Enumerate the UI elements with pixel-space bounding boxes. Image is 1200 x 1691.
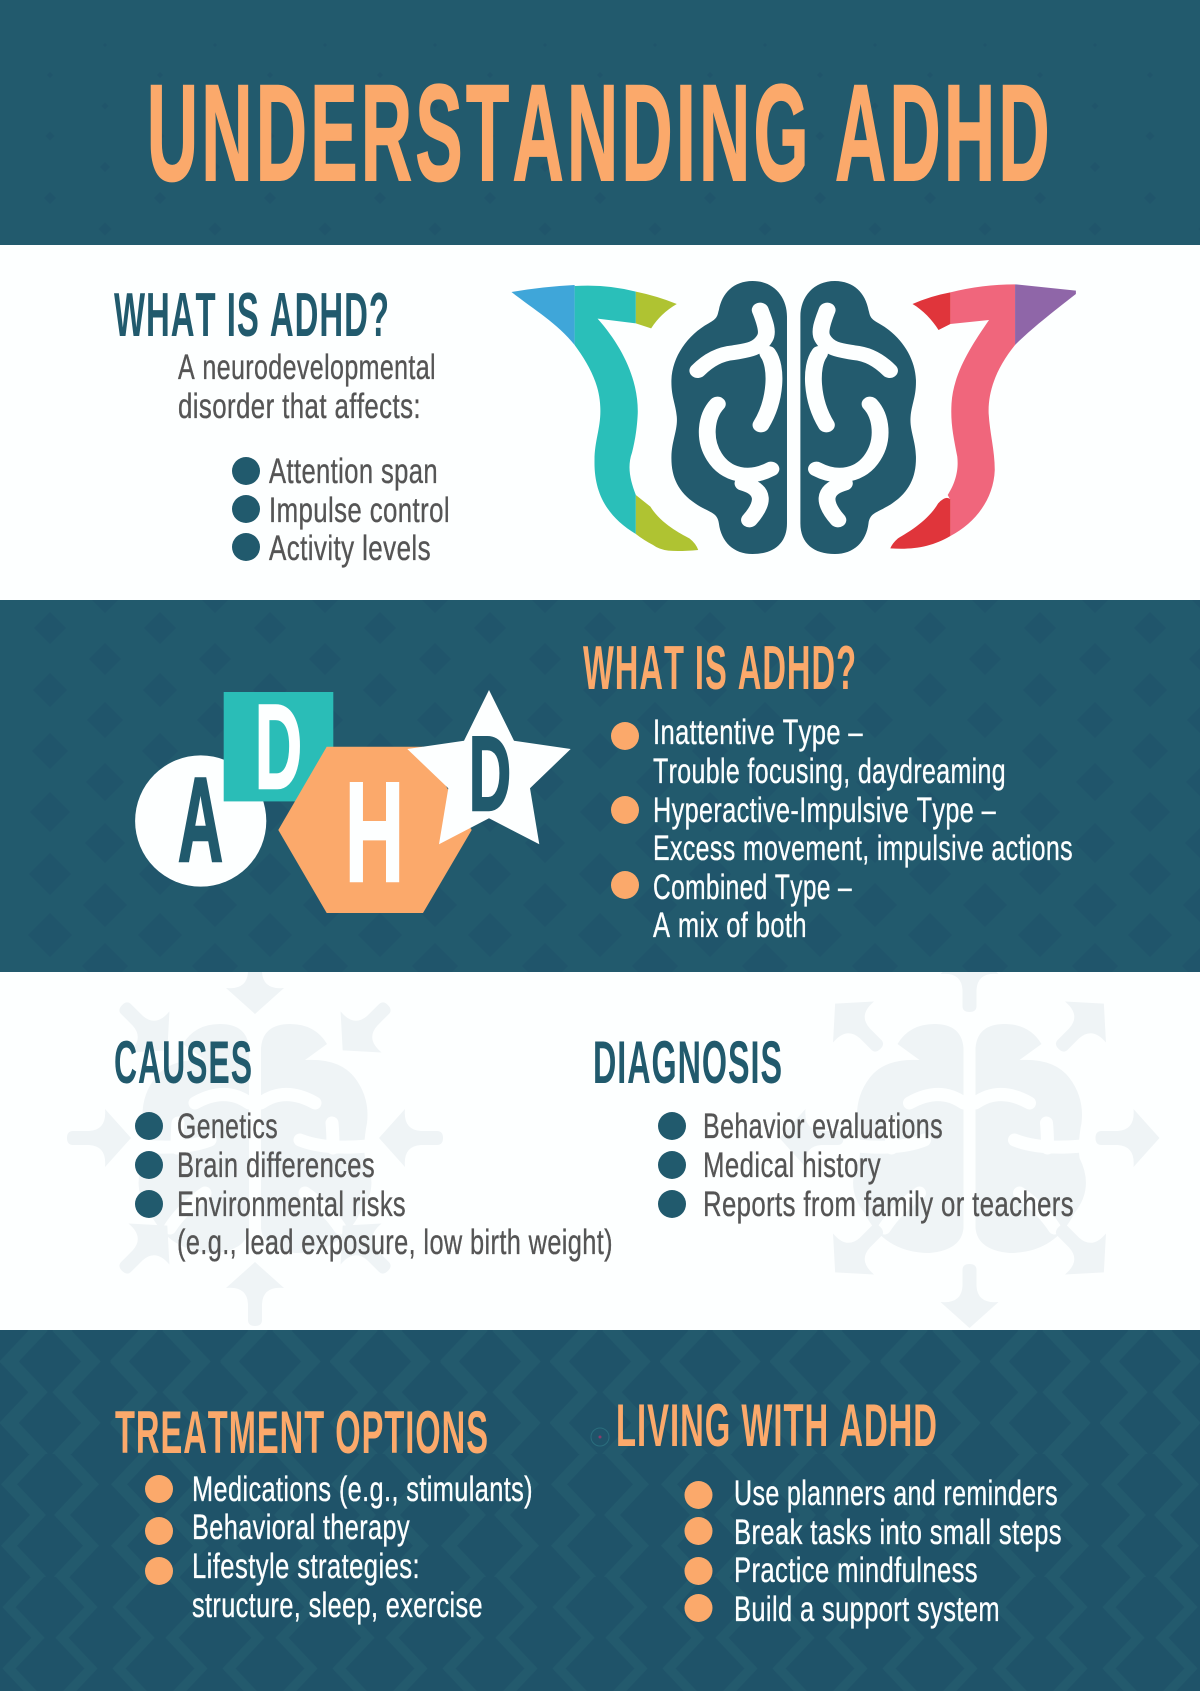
tips list: Use planners and reminders [734, 1474, 1058, 1513]
heading: TREATMENT OPTIONS [115, 1399, 489, 1466]
definition text: A neurodevelopmental [178, 348, 436, 387]
heading: WHAT IS ADHD? [583, 634, 857, 703]
star with D [407, 690, 571, 844]
types list: Combined Type – [653, 868, 852, 907]
square with D: D [255, 680, 302, 814]
definition text [178, 348, 436, 426]
small ring marker [591, 1428, 609, 1446]
circle with A: A [178, 753, 223, 887]
heading: WHAT IS ADHD? [114, 281, 390, 350]
panel: ADHD types [583, 634, 1073, 945]
heading: CAUSES [114, 1029, 253, 1096]
diagnosis list [658, 1107, 1074, 1224]
hexagon with H: H [345, 753, 404, 912]
causes list: (e.g., lead exposure, low birth weight) [177, 1223, 613, 1262]
causes list: Genetics [177, 1107, 278, 1146]
tips list: Build a support system [734, 1590, 1000, 1629]
causes list: Brain differences [177, 1146, 375, 1185]
heading: DIAGNOSIS [593, 1029, 783, 1096]
definition text: disorder that affects: [178, 387, 421, 426]
treatment list: Behavioral therapy [192, 1508, 410, 1547]
treatment list: Medications (e.g., stimulants) [192, 1470, 533, 1509]
tips list [684, 1474, 1062, 1629]
hexagon with H [278, 747, 472, 913]
panel background: what is ADHD [0, 245, 1200, 600]
bullet list: Attention span [269, 452, 438, 491]
brain [671, 281, 916, 554]
panel: causes [114, 1029, 613, 1262]
types list: Inattentive Type – [653, 713, 863, 752]
types list: A mix of both [653, 906, 807, 945]
illustration: ADHD letter shapes [135, 680, 571, 913]
panel: what is ADHD [114, 281, 450, 568]
types list [611, 713, 1073, 945]
square with D [224, 680, 333, 814]
tips list: Practice mindfulness [734, 1551, 978, 1590]
header band [0, 0, 1200, 245]
types list: Trouble focusing, daydreaming [653, 752, 1006, 791]
bullet list: Impulse control [269, 491, 450, 530]
treatment list [145, 1470, 533, 1625]
causes list [135, 1107, 613, 1262]
treatment list: Lifestyle strategies: [192, 1547, 420, 1586]
panel: living with ADHD [591, 1392, 1062, 1629]
panel background: types [0, 598, 1200, 972]
heading: LIVING WITH ADHD [616, 1392, 938, 1459]
circle with A [135, 753, 266, 887]
panel: treatment options [115, 1399, 533, 1625]
bullet list: Activity levels [269, 529, 431, 568]
panel background: treatment and living [0, 1330, 1200, 1691]
panel: diagnosis [593, 1029, 1074, 1224]
types list: Hyperactive-Impulsive Type – [653, 791, 996, 830]
watermark: brain with inward arrows [67, 950, 443, 1326]
illustration: brain with coloured ribbons [511, 281, 1076, 554]
panel background: causes and diagnosis [0, 972, 1200, 1330]
diagnosis list: Reports from family or teachers [703, 1185, 1074, 1224]
right ribbon [890, 284, 1076, 549]
left ribbon [511, 285, 698, 551]
star with D: D [469, 715, 511, 833]
tips list: Break tasks into small steps [734, 1513, 1062, 1552]
bullet list [232, 452, 450, 568]
causes list: Environmental risks [177, 1185, 406, 1224]
treatment list: structure, sleep, exercise [192, 1586, 483, 1625]
diagnosis list: Behavior evaluations [703, 1107, 943, 1146]
watermark: brain with outward arrows [780, 948, 1160, 1328]
diagnosis list: Medical history [703, 1146, 881, 1185]
